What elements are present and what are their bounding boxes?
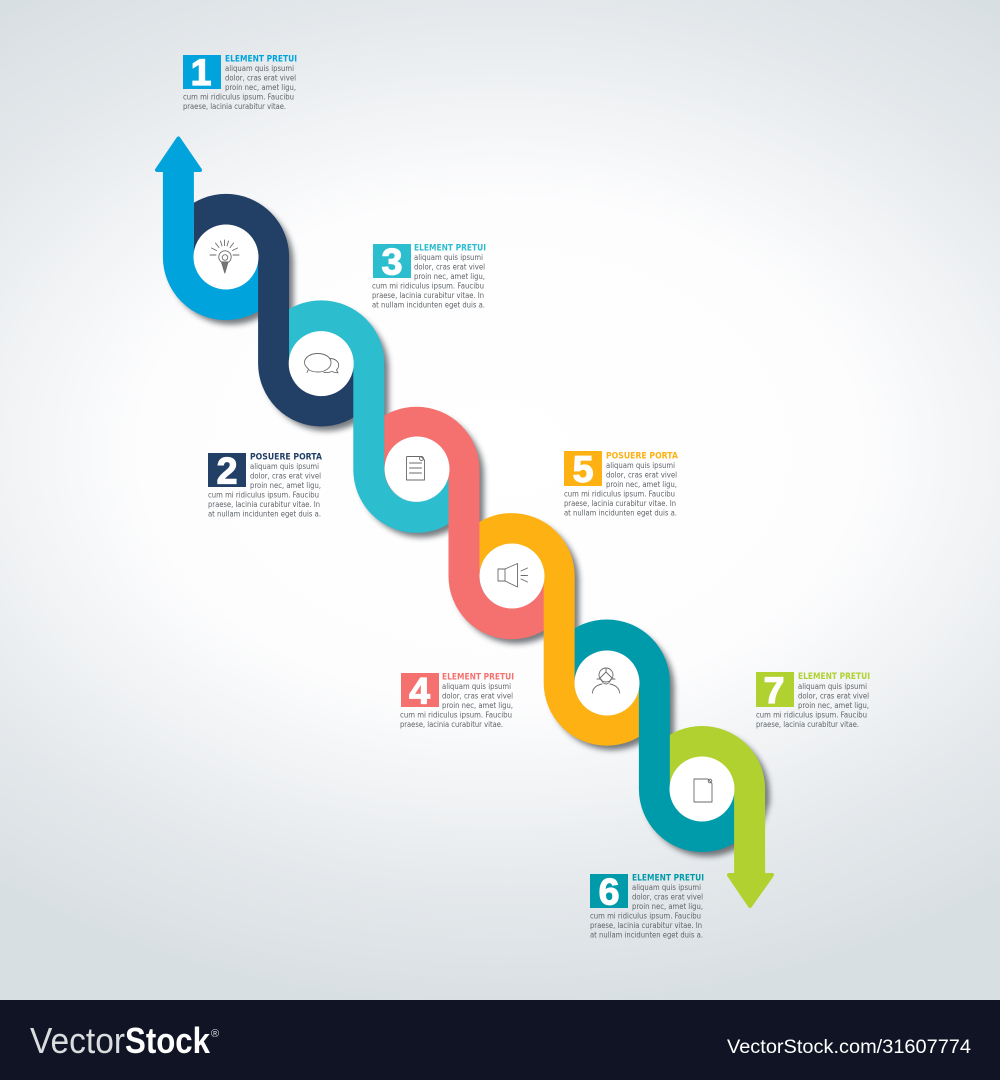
text block 4 <box>400 670 514 729</box>
ribbon: navy segment <box>178 209 369 411</box>
text block 4: 4 <box>409 670 430 712</box>
text block 4: ELEMENT PRETUI <box>442 672 514 682</box>
text block 4: praese, lacinia curabitur vitae. <box>400 719 503 729</box>
text block 6: 6 <box>599 870 619 912</box>
text block 3: ELEMENT PRETUI <box>414 244 486 254</box>
text block 1 <box>183 51 297 111</box>
text block 6 <box>590 870 704 940</box>
text block 1: 1 <box>191 51 211 93</box>
text block 2: proin nec, amet ligu, <box>250 480 321 490</box>
text block 3: proin nec, amet ligu, <box>414 271 485 281</box>
text block 6: praese, lacinia curabitur vitae. In <box>590 920 702 930</box>
text block 7: proin nec, amet ligu, <box>798 700 869 710</box>
text block 6: dolor, cras erat vivel <box>632 892 703 902</box>
text block 7 <box>756 669 870 729</box>
ribbon: turquoise segment <box>274 316 464 517</box>
text block 3: 3 <box>382 240 402 282</box>
text block 7: aliquam quis ipsumi <box>798 681 867 691</box>
text block 2 <box>208 450 322 518</box>
footer image id: VectorStock.com/31607774 <box>727 1037 971 1058</box>
text block 5: at nullam incidunten eget duis a. <box>564 508 677 518</box>
text block 2: praese, lacinia curabitur vitae. In <box>208 499 320 509</box>
footer logo: ® <box>211 1028 219 1040</box>
ribbon: coral segment <box>369 422 559 624</box>
text block 2: dolor, cras erat vivel <box>250 470 321 480</box>
icon circle: speech bubbles <box>289 331 354 396</box>
text block 5 <box>564 448 678 518</box>
text block 3 <box>372 240 486 310</box>
text block 6: at nullam incidunten eget duis a. <box>590 930 703 940</box>
footer bar <box>0 1000 1000 1080</box>
text block 4: cum mi ridiculus ipsum. Faucibu <box>400 710 512 720</box>
text block 1: dolor, cras erat vivel <box>225 72 296 82</box>
text block 3: aliquam quis ipsumi <box>414 252 483 262</box>
text block 5: cum mi ridiculus ipsum. Faucibu <box>564 488 675 498</box>
icon circle: document <box>384 436 450 502</box>
text block 7: ELEMENT PRETUI <box>798 672 870 682</box>
text block 6: proin nec, amet ligu, <box>632 901 703 911</box>
text block 1: proin nec, amet ligu, <box>225 82 296 92</box>
text block 4: aliquam quis ipsumi <box>442 681 511 691</box>
icon circle: person <box>574 650 640 716</box>
text block 5: proin nec, amet ligu, <box>606 479 677 489</box>
text block 4: dolor, cras erat vivel <box>442 690 513 700</box>
text block 4: proin nec, amet ligu, <box>442 700 513 710</box>
icon circle: megaphone <box>480 544 544 608</box>
text block 3: dolor, cras erat vivel <box>414 262 485 272</box>
text block 2: POSUERE PORTA <box>250 452 322 462</box>
text block 5: aliquam quis ipsumi <box>606 460 675 470</box>
text block 1: cum mi ridiculus ipsum. Faucibu <box>183 92 294 102</box>
footer logo <box>30 1020 219 1061</box>
text block 3: cum mi ridiculus ipsum. Faucibu <box>372 280 484 290</box>
text block 3: at nullam incidunten eget duis a. <box>372 300 485 310</box>
text block 2: aliquam quis ipsumi <box>250 461 319 471</box>
text block 1: ELEMENT PRETUI <box>225 54 297 64</box>
text block 5: 5 <box>573 448 593 490</box>
text block 2: at nullam incidunten eget duis a. <box>208 508 321 518</box>
text block 3: praese, lacinia curabitur vitae. In <box>372 290 484 300</box>
ribbon: amber segment <box>464 529 654 730</box>
text block 5: POSUERE PORTA <box>606 452 678 462</box>
text block 7: cum mi ridiculus ipsum. Faucibu <box>756 710 867 720</box>
ribbon: lime segment with down arrow <box>654 741 772 906</box>
text block 6: ELEMENT PRETUI <box>632 874 704 884</box>
text block 7: dolor, cras erat vivel <box>798 690 869 700</box>
text block 7: 7 <box>764 669 784 711</box>
ribbon: dark teal segment <box>559 635 750 837</box>
ribbon shadows <box>183 215 755 842</box>
text block 1: praese, lacinia curabitur vitae. <box>183 101 286 111</box>
text block 6: cum mi ridiculus ipsum. Faucibu <box>590 910 701 920</box>
footer logo: Vector <box>30 1020 125 1061</box>
text block 7: praese, lacinia curabitur vitae. <box>756 719 859 729</box>
footer logo: Stock <box>125 1020 211 1061</box>
text block 5: praese, lacinia curabitur vitae. In <box>564 498 676 508</box>
text block 1: aliquam quis ipsumi <box>225 63 294 73</box>
icon circle: blank page <box>670 756 734 822</box>
ribbon: blue segment with up arrow <box>157 138 274 305</box>
text block 2: 2 <box>217 450 237 492</box>
icon circle: light bulb <box>194 224 258 290</box>
text block 6: aliquam quis ipsumi <box>632 882 701 892</box>
text block 5: dolor, cras erat vivel <box>606 470 677 480</box>
text block 2: cum mi ridiculus ipsum. Faucibu <box>208 490 319 500</box>
